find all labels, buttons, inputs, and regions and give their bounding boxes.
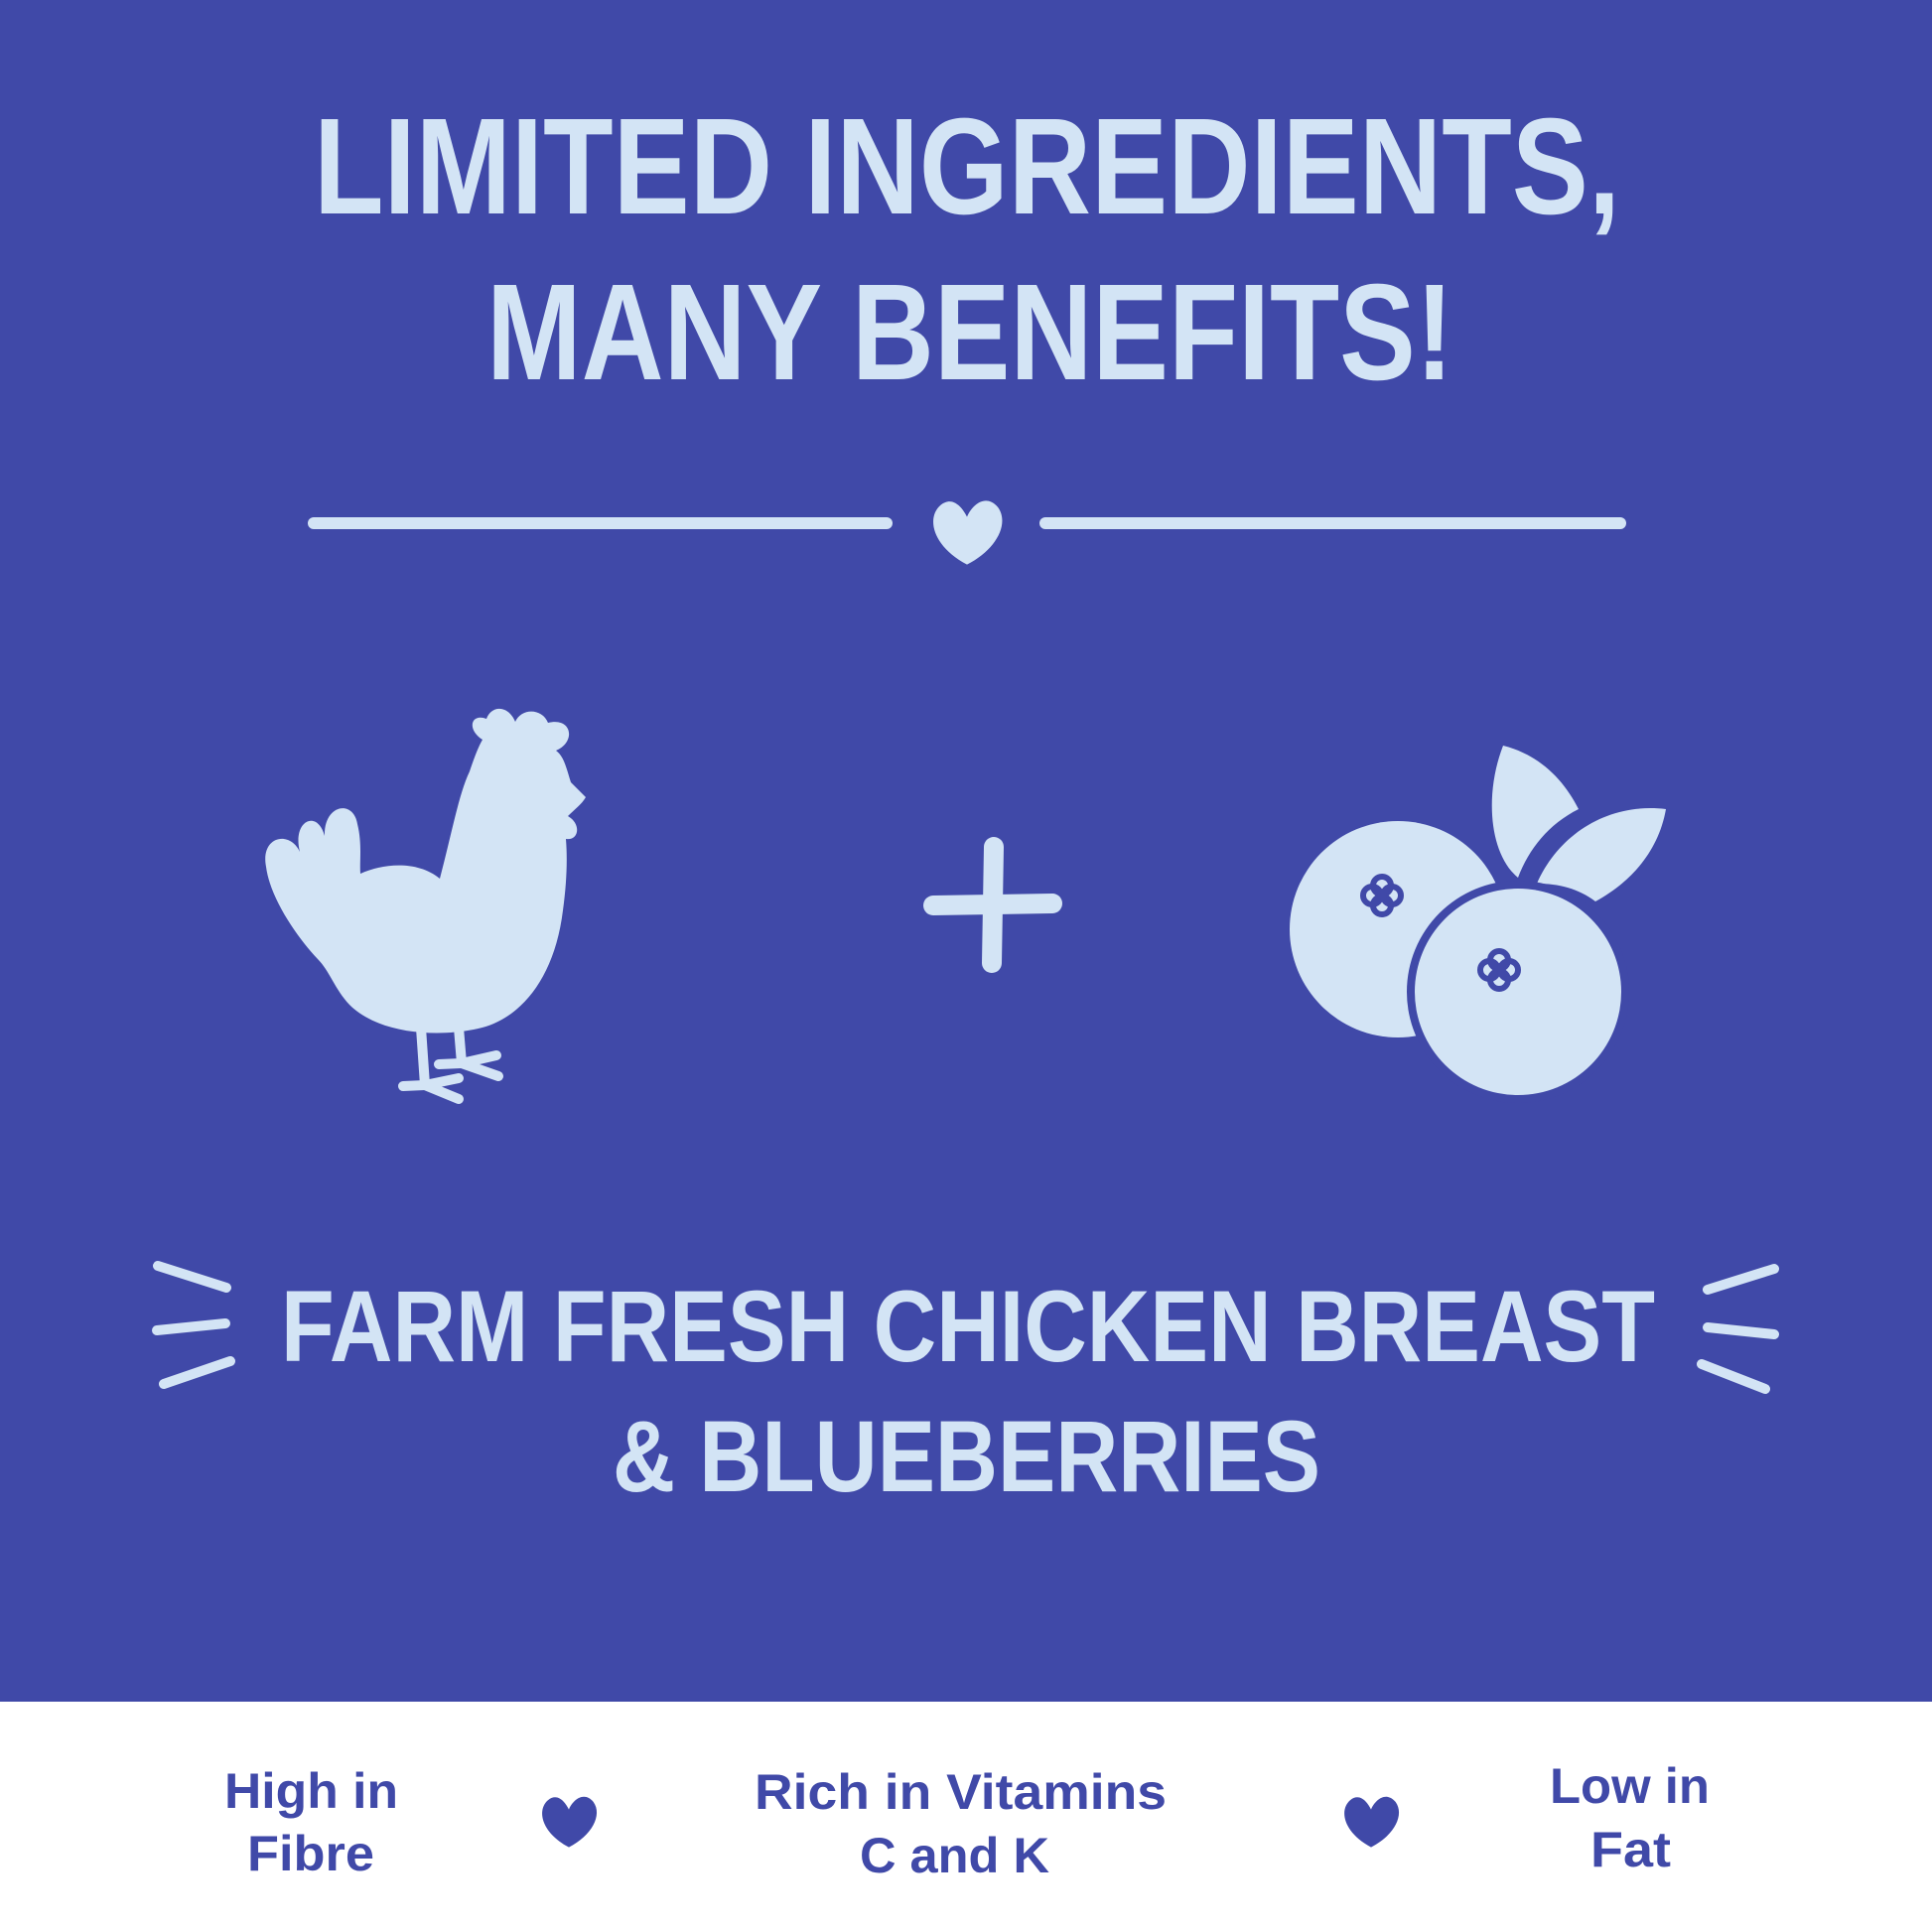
icon: heart 2 [1344,1797,1399,1848]
benefit: low in fat: Low in [1550,1758,1710,1814]
subtitle [281,1270,1655,1513]
benefit: high in fibre [224,1763,398,1881]
benefit: vitamins: C and K [860,1828,1049,1883]
icon: heart 1 [542,1797,597,1848]
benefit: high in fibre: Fibre [247,1826,374,1881]
icon: plus [933,847,1052,963]
icon: chicken [265,709,586,1099]
benefit: high in fibre: High in [224,1763,398,1819]
title: LIMITED INGREDIENTS, [314,90,1620,243]
subtitle: & BLUEBERRIES [613,1400,1320,1513]
title [314,90,1620,409]
benefit: low in fat [1550,1758,1710,1877]
accent dashes left [157,1266,230,1384]
divider with heart [314,500,1620,565]
accent dashes right [1702,1269,1774,1389]
subtitle: FARM FRESH CHICKEN BREAST [281,1270,1655,1383]
panel: white footer [0,1702,1932,1932]
benefit: low in fat: Fat [1590,1822,1671,1877]
title: MANY BENEFITS! [486,256,1453,409]
benefit: vitamins [755,1764,1167,1883]
icon: blueberries [1290,746,1666,1103]
benefit: vitamins: Rich in Vitamins [755,1764,1167,1820]
